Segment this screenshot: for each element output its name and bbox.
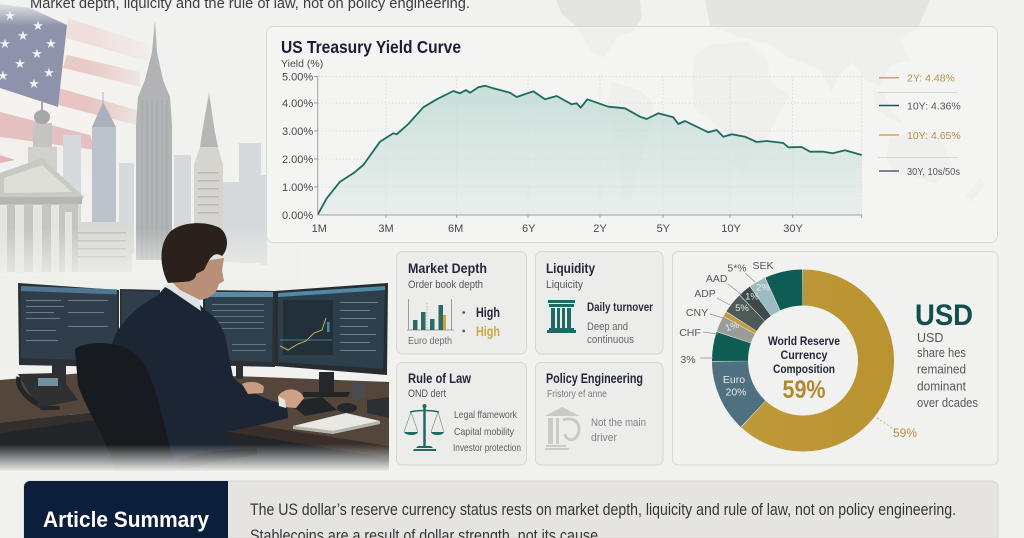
illustration: American flag: ★	[31, 47, 43, 62]
donut segment labels: Euro	[723, 374, 745, 386]
card text: Deep and	[587, 321, 628, 333]
donut outside labels: ADP	[694, 288, 716, 300]
card text	[591, 417, 646, 444]
donut segment labels: 1%	[724, 319, 741, 334]
summary label block: Article Summary	[43, 507, 210, 532]
illustration: trader at desk	[0, 223, 389, 472]
donut outside labels: 5*%	[727, 262, 747, 274]
donut segment labels: 5%	[735, 303, 749, 314]
donut outside labels: SEK	[752, 260, 774, 272]
desk	[0, 372, 389, 471]
monitor: second	[120, 289, 160, 345]
illustration: city skyline	[0, 20, 300, 367]
donut outside labels	[679, 260, 774, 366]
x axis labels: 2Y	[593, 223, 607, 235]
rating: high: High	[476, 304, 500, 320]
card subheading: Order book depth	[408, 279, 483, 291]
donut center label: World Reserve	[768, 336, 840, 348]
y axis labels: 2.00%	[282, 154, 313, 166]
card subheading: OND dert	[408, 388, 446, 400]
rating: high: High	[476, 323, 500, 339]
donut center label: Currency	[780, 350, 828, 362]
icon: faded institution	[545, 407, 580, 450]
y axis title: Yield (%)	[281, 58, 323, 70]
USD description: share hes	[917, 346, 966, 360]
illustration: American flag: ★	[14, 57, 26, 72]
x axis labels: 1M	[312, 223, 327, 235]
chart caption: Euro depth	[408, 336, 452, 347]
illustration: American flag: ★	[32, 19, 44, 34]
card: Liquidity	[536, 252, 663, 354]
y axis labels: 5.00%	[282, 72, 313, 84]
donut outside labels: CNY	[686, 307, 708, 319]
monitor: trading charts	[275, 283, 388, 397]
card text	[453, 409, 521, 454]
monitor: far left	[18, 283, 119, 384]
legend: 2Y: 4.48%	[907, 72, 955, 84]
donut center label: 59%	[782, 376, 826, 404]
legend: 30Y, 10s/50s	[907, 166, 960, 178]
donut segment labels: 2%	[756, 282, 770, 294]
card text: Capital mobility	[454, 426, 515, 438]
x axis labels: 5Y	[657, 223, 671, 235]
y axis labels	[282, 72, 313, 222]
keyboard, mouse and notebook	[287, 382, 389, 434]
x axis labels: 6Y	[522, 223, 536, 235]
donut outside labels: 3%	[680, 354, 696, 366]
monitor: third	[203, 290, 275, 379]
y axis labels: 3.00%	[282, 126, 313, 138]
article summary banner	[24, 481, 998, 538]
USD description: over dcades	[917, 396, 978, 410]
x axis labels	[312, 223, 803, 235]
card subheading: Fristory ef anne	[547, 389, 607, 400]
card text: continuous	[587, 334, 634, 346]
donut chart	[730, 288, 876, 434]
card heading: Market Depth	[408, 261, 487, 276]
trader: man in suit	[112, 223, 304, 471]
x axis labels: 3M	[378, 223, 394, 235]
illustration: American flag: ★	[45, 37, 57, 52]
illustration: American flag: ★	[43, 66, 55, 81]
line chart: yield curve	[314, 76, 862, 218]
y axis labels: 0.00%	[282, 210, 313, 222]
donut center label	[768, 336, 840, 404]
card text: Legal ffamework	[454, 409, 518, 421]
donut outside labels: AAD	[706, 273, 728, 285]
USD heading: USD	[915, 299, 973, 332]
card: Rule of Law	[396, 362, 526, 465]
desk phone	[18, 373, 78, 410]
x axis labels: 10Y	[721, 223, 741, 235]
icon: scales of justice	[404, 404, 444, 451]
card subheading: Liquicity	[546, 279, 583, 291]
illustration: American flag	[0, 0, 160, 185]
panel: world reserve currency composition	[672, 252, 998, 465]
card: Market Depth	[396, 252, 526, 354]
y axis labels: 1.00%	[282, 182, 313, 194]
legend	[878, 72, 961, 178]
callout: 59% share	[877, 418, 917, 440]
rating: high	[462, 304, 500, 339]
donut outside labels: CHF	[679, 327, 701, 339]
illustration: American flag: ★	[17, 29, 29, 44]
summary text	[250, 501, 956, 538]
card heading: Policy Engineering	[546, 371, 643, 386]
card: Policy Engineering	[536, 362, 663, 465]
card text	[587, 302, 653, 346]
USD description: USD	[917, 331, 943, 345]
summary label block	[24, 481, 228, 538]
card text: Daily turnover	[587, 302, 653, 314]
card heading: Rule of Law	[408, 371, 471, 386]
callout: 59% share: 59%	[893, 426, 917, 440]
icon: depth bar chart	[407, 299, 454, 330]
legend: 10Y: 4.36%	[907, 100, 961, 112]
USD description: dominant	[917, 380, 966, 394]
card text: Investor protection	[453, 442, 521, 454]
x axis labels: 30Y	[783, 223, 803, 235]
USD description	[917, 331, 978, 410]
card text: driver	[591, 432, 617, 444]
donut segment labels: 1%	[745, 292, 759, 302]
donut segment labels: 20%	[725, 386, 747, 398]
office chair	[75, 343, 176, 471]
USD description: remained	[917, 362, 966, 376]
x axis labels: 6M	[448, 223, 463, 235]
chart title: US Treasury Yield Curve	[281, 37, 461, 57]
y axis labels: 4.00%	[282, 98, 313, 110]
illustration: American flag: ★	[28, 77, 40, 92]
icon: bank building	[547, 300, 576, 333]
card heading: Liquidity	[546, 261, 595, 276]
panel: US Treasury yield curve	[266, 26, 998, 242]
chair seat	[175, 449, 257, 471]
legend: 10Y: 4.65%	[907, 130, 961, 142]
background world map	[556, 0, 984, 202]
illustration: American flag: ★	[4, 9, 16, 24]
card text: Not the main	[591, 417, 646, 429]
donut segment labels	[723, 282, 770, 398]
donut center label: Composition	[773, 364, 835, 376]
